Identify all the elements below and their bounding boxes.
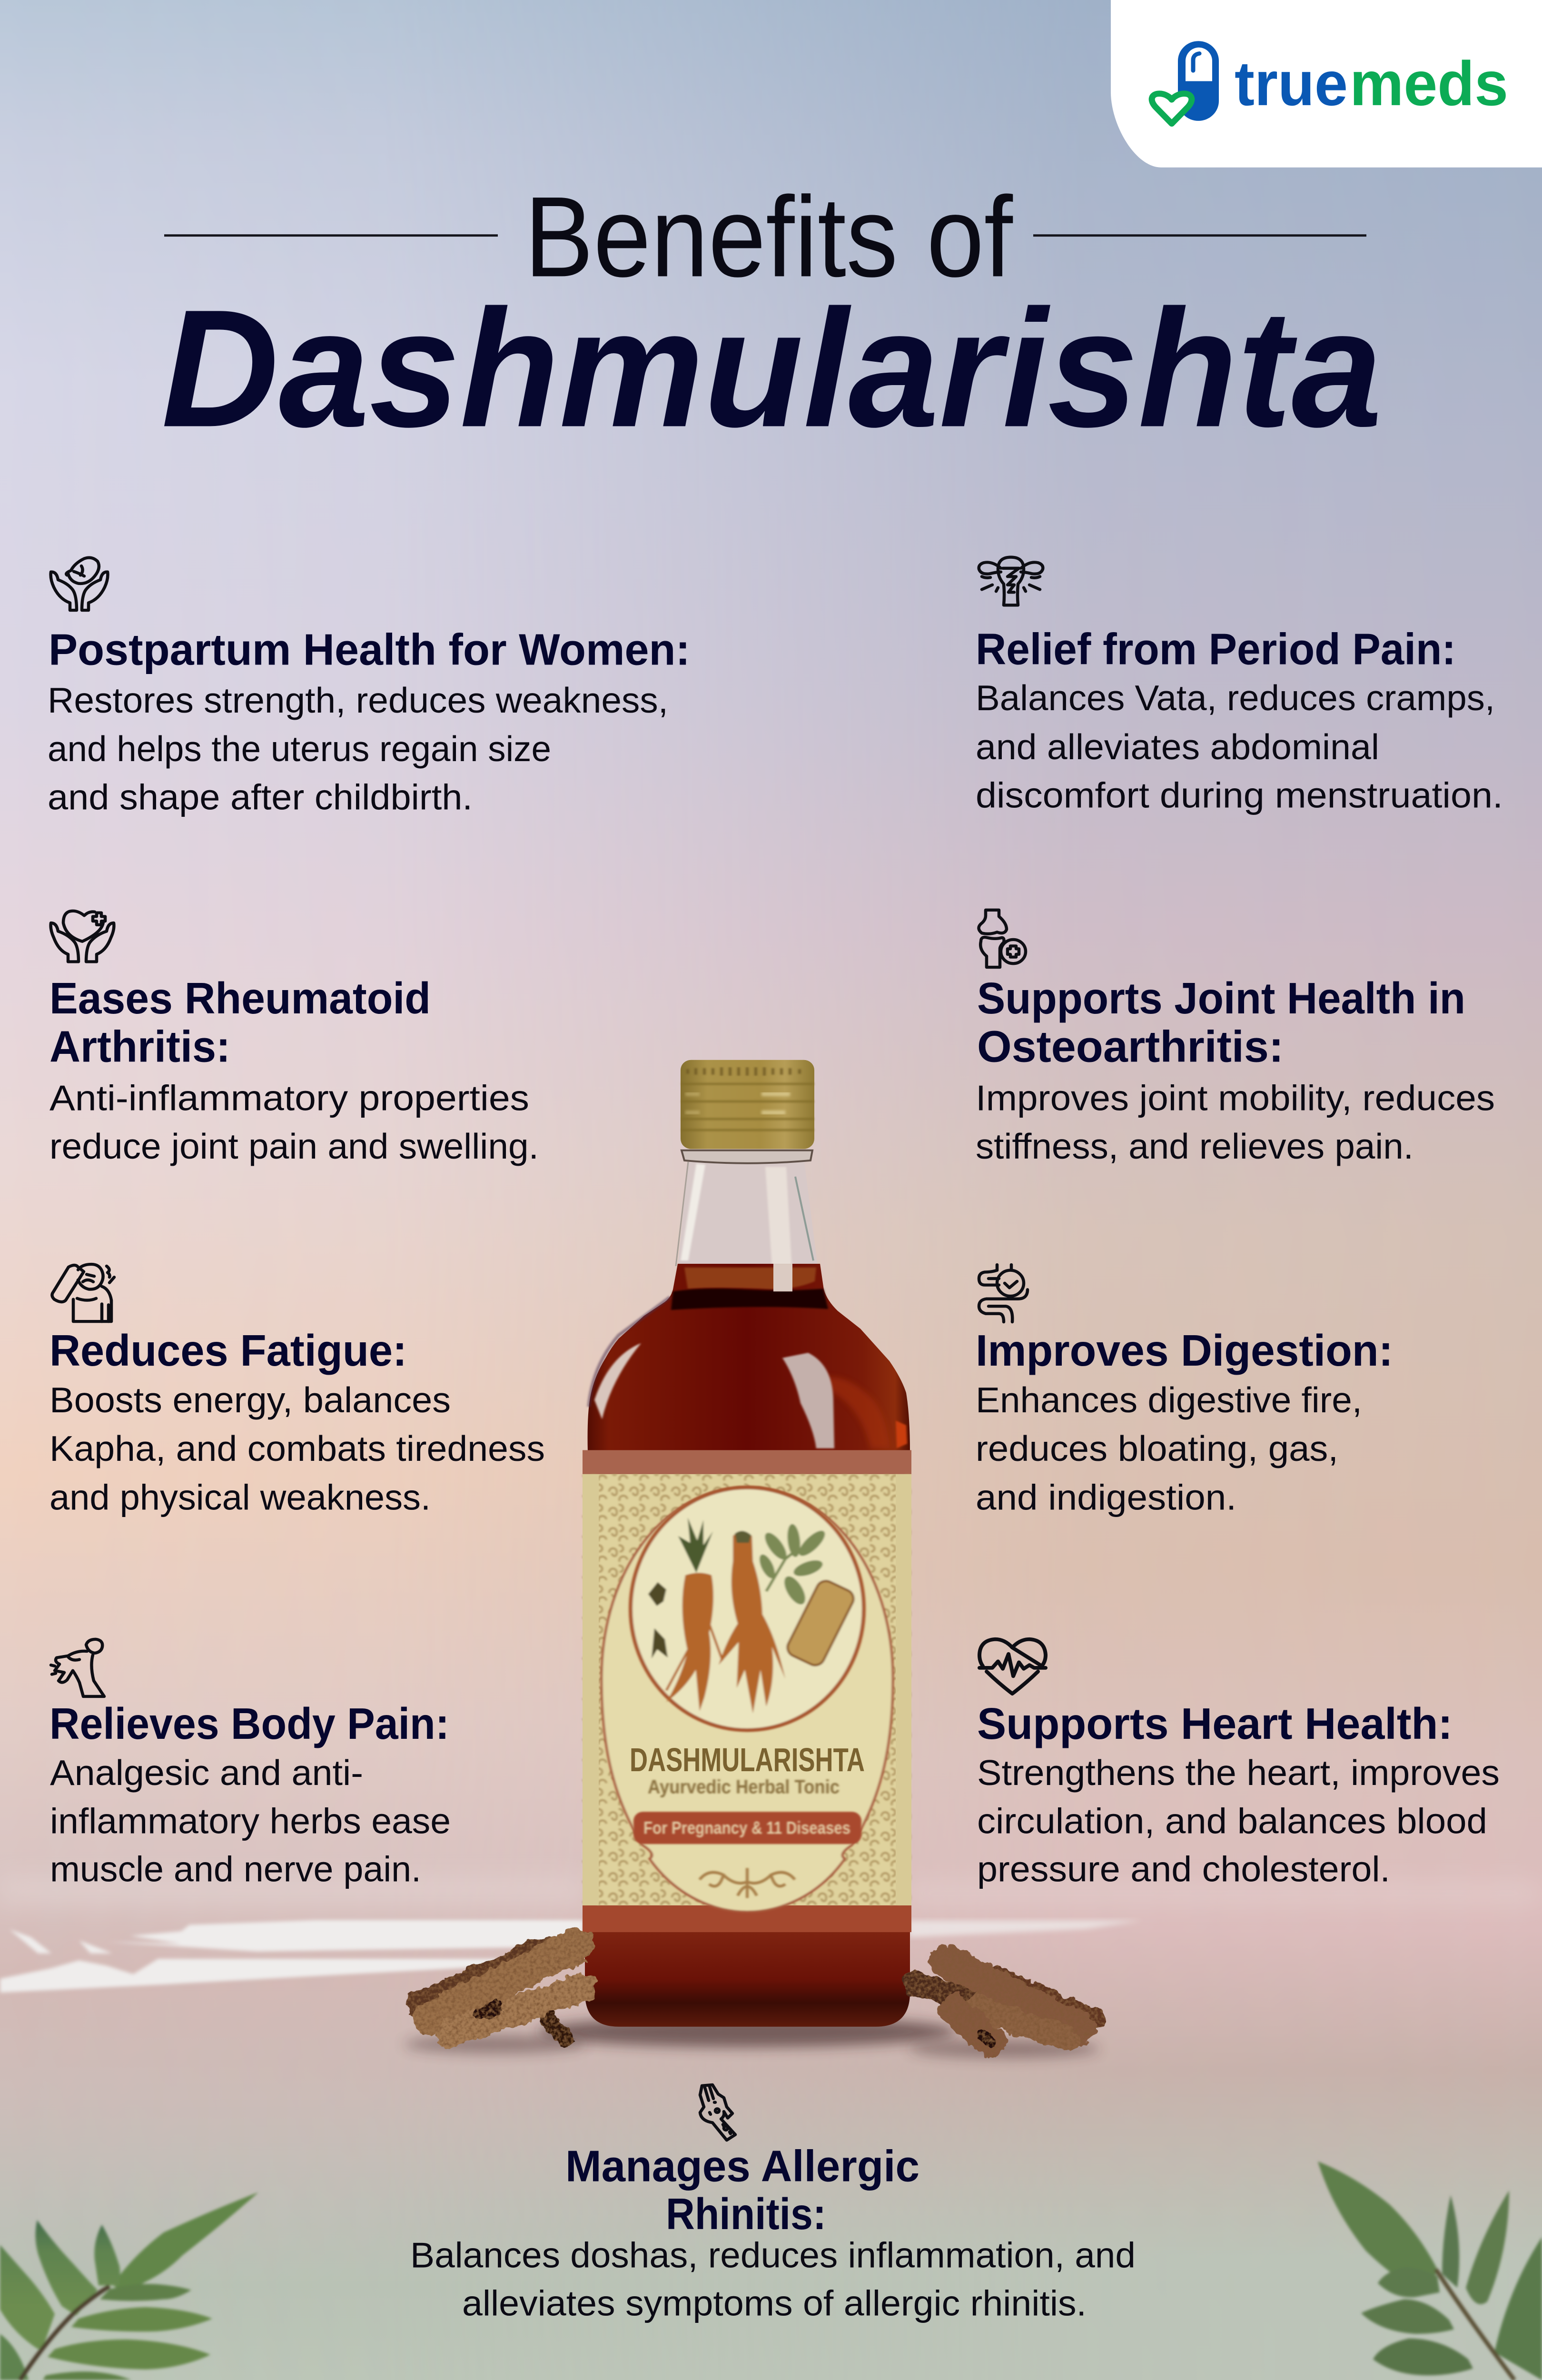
main root <box>719 1531 785 1714</box>
liquid neck bands <box>671 1264 907 1448</box>
panel: allergic rhinitis: Rhinitis: <box>666 2189 826 2239</box>
panel: period pain <box>976 557 1503 815</box>
panel: postpartum health: Restores strength, reduces weakness, <box>48 680 668 721</box>
panel: fatigue: Reduces Fatigue: <box>49 1326 407 1376</box>
panel: body pain: Analgesic and anti- <box>50 1753 363 1793</box>
panel: period pain: and alleviates abdominal <box>976 727 1379 767</box>
panel: heart health: pressure and cholesterol. <box>977 1849 1390 1889</box>
plant bottom left <box>0 2192 258 2380</box>
bark pile left <box>405 1945 585 2053</box>
floor light streaks <box>0 1877 1542 1993</box>
panel: allergic rhinitis: Balances doshas, reduces inflammation, and <box>410 2235 1136 2275</box>
panel: joint health: Supports Joint Health in <box>977 973 1465 1023</box>
panel: postpartum health: Postpartum Health for Women: <box>49 625 690 674</box>
panel: rheumatoid arthritis: Anti-inflammatory properties <box>49 1078 529 1118</box>
label shield frame <box>602 1488 893 1912</box>
panel: body pain: muscle and nerve pain. <box>50 1849 421 1889</box>
panel: period pain: Balances Vata, reduces cramps, <box>976 678 1495 718</box>
icon: uterus <box>979 557 1043 605</box>
panel: fatigue: Boosts energy, balances <box>49 1380 451 1420</box>
panel: fatigue: and physical weakness. <box>49 1478 431 1517</box>
icon: person with back pain <box>51 1639 104 1696</box>
bottle base <box>585 1931 910 2027</box>
panel: joint health: Improves joint mobility, reduces <box>976 1078 1495 1118</box>
label red pill <box>633 1812 861 1844</box>
panel: rheumatoid arthritis: Eases Rheumatoid <box>49 973 431 1023</box>
icon: capsule <box>1178 41 1219 121</box>
glass highlights <box>594 1343 834 1448</box>
icon: intestine with check <box>979 1265 1028 1322</box>
panel: joint health: Osteoarthritis: <box>977 1022 1284 1071</box>
panel: body pain <box>49 1639 451 1889</box>
panel: rheumatoid arthritis <box>49 911 539 1167</box>
panel: postpartum health: and shape after childbirth. <box>48 777 473 817</box>
logo wordmark: true <box>1235 49 1348 119</box>
bark pile right <box>909 1960 1099 2058</box>
title <box>161 173 1382 462</box>
logo wordmark <box>1235 49 1508 119</box>
icon: baby in hands <box>51 558 108 610</box>
title: Dashmularishta <box>161 274 1382 462</box>
panel: heart health: circulation, and balances blood <box>977 1801 1487 1841</box>
panel: heart health: Strengthens the heart, improves <box>977 1753 1500 1793</box>
panel: allergic rhinitis: Manages Allergic <box>565 2142 919 2191</box>
panel: body pain: Relieves Body Pain: <box>49 1699 449 1749</box>
title: Benefits of <box>524 173 1013 301</box>
icon: tired person <box>52 1264 114 1321</box>
panel: fatigue: Kapha, and combats tiredness <box>49 1428 545 1469</box>
icon: heart <box>1152 94 1192 124</box>
small flower <box>648 1582 666 1606</box>
icon: heart with pulse <box>979 1639 1046 1694</box>
panel: fatigue <box>49 1264 545 1517</box>
icon: hand with rash <box>700 2085 735 2140</box>
panel: joint health: stiffness, and relieves pain. <box>976 1126 1414 1167</box>
bottle neck glass <box>676 1162 818 1287</box>
logo badge <box>1111 0 1542 168</box>
logo wordmark: meds <box>1350 49 1508 119</box>
panel: period pain: Relief from Period Pain: <box>976 625 1456 674</box>
label red pill: For Pregnancy & 11 Diseases <box>643 1818 850 1838</box>
bottle body liquid <box>588 1264 910 1453</box>
neck ring <box>682 1150 812 1163</box>
label flourish <box>700 1868 795 1898</box>
panel: allergic rhinitis <box>410 2085 1136 2323</box>
upper label band <box>583 1450 911 1475</box>
panel: body pain: inflammatory herbs ease <box>50 1801 451 1841</box>
panel: digestion: Improves Digestion: <box>976 1326 1393 1376</box>
bottle <box>583 1060 911 2027</box>
panel: digestion: Enhances digestive fire, <box>976 1380 1362 1420</box>
bottle cap <box>681 1060 814 1149</box>
icon: knee joint <box>979 910 1026 967</box>
panel: rheumatoid arthritis: reduce joint pain and swelling. <box>49 1126 539 1167</box>
panel: heart health <box>977 1639 1500 1889</box>
panel: digestion <box>976 1265 1393 1517</box>
plant bottom right <box>1318 2162 1542 2380</box>
shadow under bottle <box>538 2016 957 2047</box>
label plant medallion <box>631 1488 864 1730</box>
panel: period pain: discomfort during menstruation. <box>976 775 1503 815</box>
left root <box>666 1573 713 1711</box>
panel: postpartum health: and helps the uterus regain size <box>48 729 551 769</box>
icon: heart in hands <box>51 911 114 962</box>
panel: rheumatoid arthritis: Arthritis: <box>49 1022 230 1071</box>
panel: digestion: and indigestion. <box>976 1478 1236 1517</box>
label subtitle: Ayurvedic Herbal Tonic <box>648 1776 840 1797</box>
shoulder edge <box>589 1297 670 1407</box>
panel: joint health <box>976 910 1495 1167</box>
label <box>583 1474 911 1912</box>
label product name: DASHMULARISHTA <box>630 1742 865 1779</box>
compound leaves <box>756 1523 829 1607</box>
panel: digestion: reduces bloating, gas, <box>976 1428 1338 1469</box>
green sprout <box>678 1517 713 1573</box>
panel: postpartum health <box>48 558 690 817</box>
panel: allergic rhinitis: alleviates symptoms of allergic rhinitis. <box>462 2283 1087 2323</box>
panel: heart health: Supports Heart Health: <box>977 1699 1453 1749</box>
bark piece <box>784 1578 857 1668</box>
lower label band <box>583 1904 911 1932</box>
